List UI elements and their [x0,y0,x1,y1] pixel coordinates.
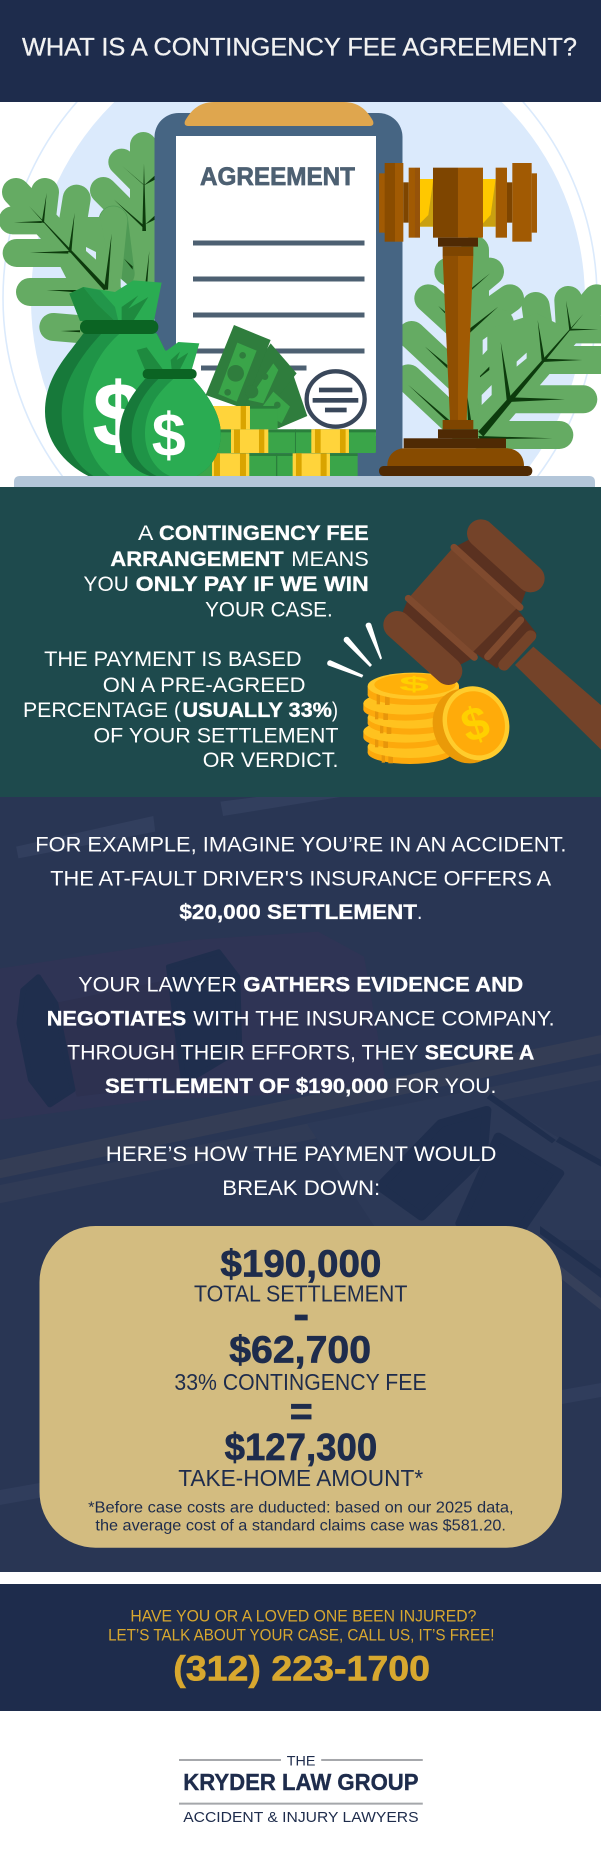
large money bag [45,280,173,476]
text: breakdown lead-in: HERE’S HOW THE PAYMENT WOULD [106,1141,496,1166]
call to action banner: (312) 223-1700 [173,1649,430,1688]
title banner [0,0,601,102]
text: lawyer negotiation: NEGOTIATES [47,1006,186,1030]
text: lawyer negotiation: SECURE A [425,1040,534,1064]
text: arrangement definition: CONTINGENCY FEE [159,521,369,545]
title banner: WHAT IS A CONTINGENCY FEE AGREEMENT? [22,34,577,62]
icon: coin stack: $ [455,695,496,753]
stack row 3 [197,453,358,476]
clipboard [154,102,402,493]
text: breakdown lead-in [106,1141,496,1200]
callout: payment breakdown: TOTAL SETTLEMENT [194,1282,408,1307]
text: lawyer negotiation: FOR YOU. [395,1073,496,1098]
icon: coin stack [363,672,510,764]
text: payment basis: OR VERDICT. [203,748,338,772]
text: payment basis: PERCENTAGE ( [23,698,181,722]
text: lawyer negotiation: YOUR LAWYER [78,972,237,996]
text: lawyer negotiation: GATHERS EVIDENCE AND [243,972,523,996]
call to action banner: LET’S TALK ABOUT YOUR CASE, CALL US, IT’S FREE! [108,1625,494,1644]
callout: payment breakdown: = [290,1389,313,1433]
text: lawyer negotiation [47,972,555,1098]
panel: settlement example [0,787,601,1572]
money stacks, bills and stamp [197,325,376,476]
stamp [307,371,365,427]
text: payment basis: THE PAYMENT IS BASED [44,647,302,671]
call to action banner [0,1584,601,1711]
callout: payment breakdown: $127,300 [225,1426,377,1468]
right leaves [408,250,601,439]
stack row 2 [217,429,376,453]
text: arrangement definition: A [138,521,154,545]
text: arrangement definition: ARRANGEMENT [110,547,284,571]
text: lawyer negotiation: THROUGH THEIR EFFORTS, THEY [67,1040,419,1064]
text: arrangement definition: ONLY PAY IF WE WIN [136,572,369,596]
icon: coin stack: $ [399,674,429,696]
illustration: agreement, money and gavel [0,102,601,476]
logo: Kryder Law Group: THE [287,1753,315,1769]
callout: payment breakdown: - [293,1290,309,1338]
logo: Kryder Law Group [179,1753,423,1826]
large money bag: $ [93,366,143,466]
call to action banner: HAVE YOU OR A LOVED ONE BEEN INJURED? [130,1606,477,1625]
icon: angled gavel [397,533,601,755]
text: payment basis [23,647,339,772]
text: example intro [35,832,567,924]
shelf [14,476,595,487]
text: payment basis: ) [332,698,338,722]
callout: payment breakdown: $190,000 [220,1242,381,1285]
small money bag [119,342,221,476]
icon: impact sparks [327,623,382,678]
text: arrangement definition: MEANS [291,547,369,571]
callout: payment breakdown: TAKE-HOME AMOUNT* [178,1466,424,1492]
callout: payment breakdown: 33% CONTINGENCY FEE [174,1370,427,1396]
callout: payment breakdown: $62,700 [229,1328,371,1371]
text: arrangement definition: YOU [84,572,129,596]
text: lawyer negotiation: SETTLEMENT OF $190,000 [105,1073,388,1098]
callout: payment breakdown: the average cost of a standard claims case was $581.20. [95,1516,506,1534]
text: breakdown lead-in: BREAK DOWN: [222,1175,380,1200]
text: payment basis: USUALLY 33% [182,698,332,722]
faded accident background [0,797,601,1310]
logo: Kryder Law Group: ACCIDENT & INJURY LAWYERS [183,1810,419,1826]
small money bag: $ [152,401,186,469]
callout: payment breakdown: *Before case costs are duducted: based on our 2025 data, [88,1498,514,1516]
logo: Kryder Law Group: KRYDER LAW GROUP [183,1770,419,1796]
left leaves [13,145,155,332]
text: example intro: . [417,899,422,924]
icon: upright gavel [379,163,537,476]
stack row 1 [213,406,278,429]
text: arrangement definition [84,521,369,621]
text: lawyer negotiation: WITH THE INSURANCE COMPANY. [193,1006,555,1030]
callout: payment breakdown [40,1226,562,1548]
panel: contingency fee explanation [0,487,601,797]
text: example intro: $20,000 SETTLEMENT [179,899,417,924]
agreement heading: AGREEMENT [200,163,355,191]
text: payment basis: OF YOUR SETTLEMENT [94,724,339,747]
text: arrangement definition: YOUR CASE. [205,598,333,621]
text: payment basis: ON A PRE-AGREED [103,673,305,697]
